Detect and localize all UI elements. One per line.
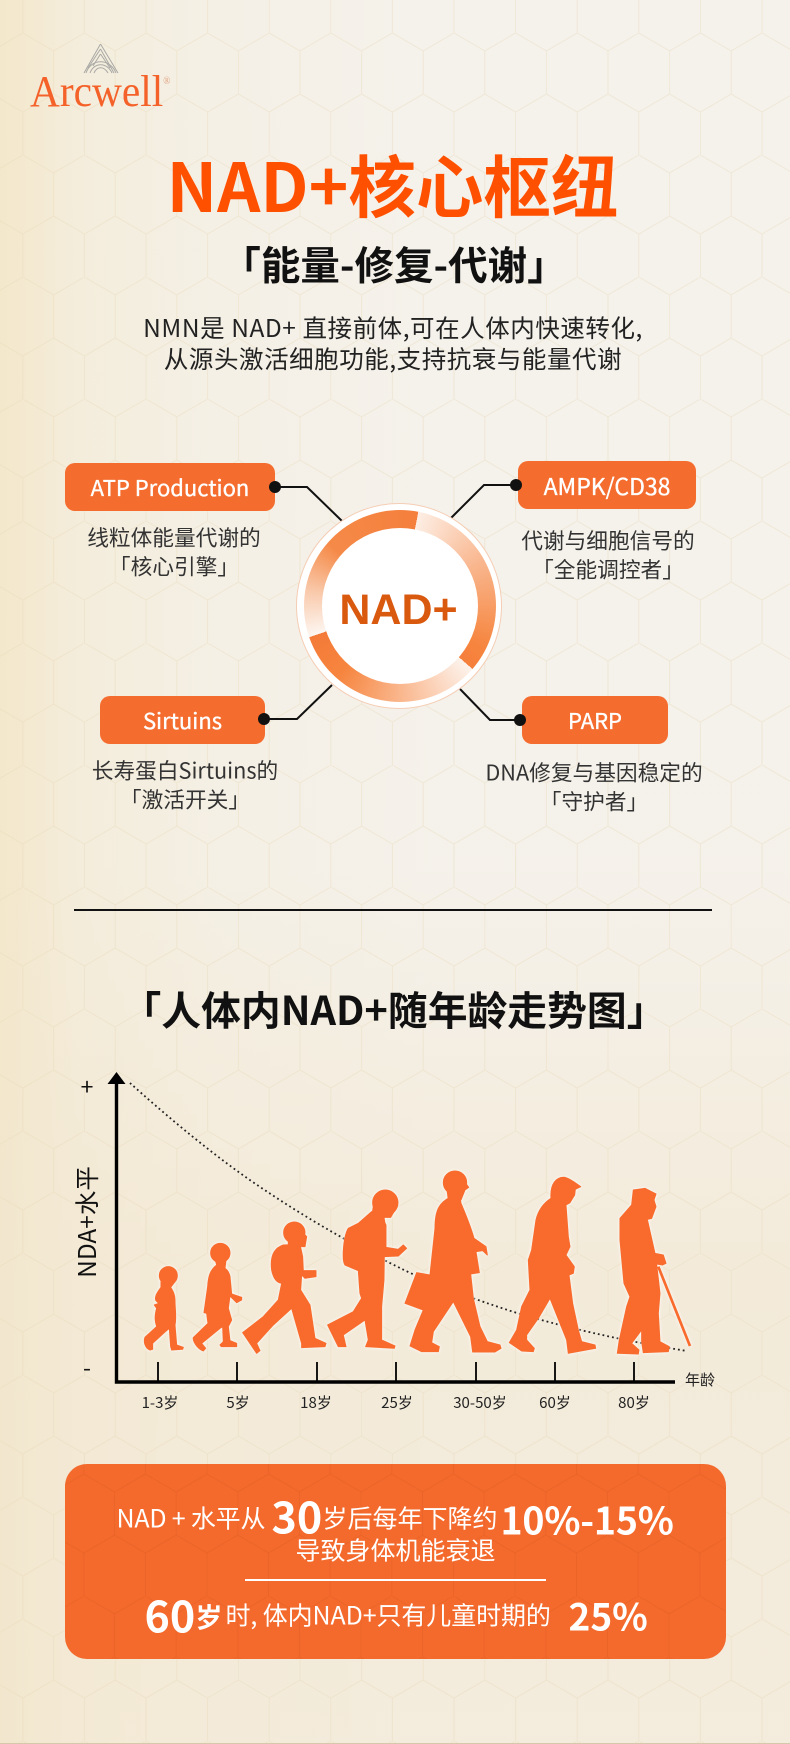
chart: NAD+ by age bbox=[69, 1068, 715, 1413]
text: PARP description: 「守护者」 bbox=[540, 785, 648, 816]
callout line 3: 60 bbox=[144, 1584, 195, 1646]
title: NAD+核心枢纽 bbox=[167, 135, 618, 232]
icon: logo triangle bbox=[84, 44, 118, 74]
person: elder with cane bbox=[617, 1188, 690, 1354]
pill: AMPK/CD38 bbox=[518, 461, 696, 509]
text: ATP description: 「核心引擎」 bbox=[109, 550, 239, 581]
pill: Sirtuins: Sirtuins bbox=[143, 704, 222, 736]
y axis scale marks: NDA+水平 bbox=[69, 1166, 104, 1278]
callout line 1: NAD + 水平从 bbox=[116, 1500, 265, 1536]
brand name: Arcwell® bbox=[30, 67, 170, 116]
person: adult with briefcase bbox=[405, 1171, 501, 1352]
axis labels: 25岁 bbox=[381, 1392, 413, 1413]
callout: decline statistics bbox=[64, 1464, 726, 1659]
silhouettes bbox=[144, 1171, 690, 1354]
intro text bbox=[143, 310, 643, 376]
hub label: NAD+ bbox=[339, 586, 458, 634]
person: child bbox=[193, 1243, 242, 1351]
axis labels: 80岁 bbox=[618, 1392, 650, 1413]
callout: decline statistics: 时, 体内NAD+只有儿童时期的 bbox=[226, 1596, 551, 1632]
text: AMPK description: 「全能调控者」 bbox=[532, 553, 684, 584]
y axis scale marks: - bbox=[83, 1349, 91, 1383]
callout: decline statistics: 岁后每年下降约 bbox=[322, 1500, 498, 1536]
text: Sirtuins description bbox=[92, 754, 278, 814]
axis labels: 1-3岁 bbox=[142, 1392, 178, 1413]
y axis scale marks bbox=[69, 1068, 104, 1383]
person: senior with cap bbox=[509, 1177, 596, 1353]
dotted trend curve bbox=[130, 1083, 687, 1351]
person: teen with backpack bbox=[243, 1222, 326, 1353]
intro text: 从源头激活细胞功能,支持抗衰与能量代谢 bbox=[164, 340, 622, 376]
person: toddler bbox=[144, 1267, 183, 1350]
connector lines bbox=[258, 479, 526, 726]
text: PARP description bbox=[485, 756, 703, 816]
callout texture bbox=[65, 1464, 726, 1659]
text: PARP description: DNA修复与基因稳定的 bbox=[485, 756, 703, 788]
callout: decline statistics: 10%-15% bbox=[500, 1490, 674, 1545]
ring centre bbox=[322, 528, 478, 684]
section heading: 「人体内NAD+随年龄走势图」 bbox=[122, 980, 666, 1037]
text: Sirtuins description: 「激活开关」 bbox=[120, 783, 250, 814]
pill: AMPK/CD38: AMPK/CD38 bbox=[544, 468, 670, 502]
axis labels: 18岁 bbox=[300, 1392, 332, 1413]
pill: Sirtuins bbox=[100, 696, 265, 744]
text: Sirtuins description: 长寿蛋白Sirtuins的 bbox=[92, 754, 278, 786]
axis labels bbox=[142, 1369, 715, 1413]
text: ATP description: 线粒体能量代谢的 bbox=[87, 522, 261, 552]
callout line 2: 导致身体机能衰退 bbox=[296, 1532, 496, 1568]
ring segments bbox=[304, 510, 496, 702]
callout: decline statistics: 岁 bbox=[196, 1596, 222, 1636]
pill: ATP Production: ATP Production bbox=[91, 471, 249, 503]
callout: decline statistics: 25% bbox=[568, 1588, 648, 1642]
axis labels: 年龄 bbox=[685, 1369, 715, 1390]
axis labels: 60岁 bbox=[539, 1392, 571, 1413]
pill: PARP: PARP bbox=[568, 704, 622, 736]
y axis scale marks: + bbox=[81, 1068, 93, 1102]
axis labels: 5岁 bbox=[226, 1392, 250, 1413]
text: AMPK description bbox=[521, 524, 695, 584]
pill: ATP Production bbox=[65, 463, 275, 511]
person: young adult with backpack bbox=[328, 1190, 407, 1348]
hub: NAD+ ring bbox=[296, 504, 500, 708]
text: AMPK description: 代谢与细胞信号的 bbox=[521, 524, 695, 556]
callout: decline statistics: 30 bbox=[272, 1484, 322, 1546]
intro text: NMN是 NAD+ 直接前体,可在人体内快速转化, bbox=[143, 310, 643, 344]
pill: PARP bbox=[522, 696, 668, 744]
axes bbox=[108, 1072, 675, 1382]
logo: Arcwell bbox=[30, 44, 170, 116]
text: ATP description bbox=[87, 522, 261, 581]
axis labels: 30-50岁 bbox=[453, 1392, 507, 1413]
subtitle: 「能量-修复-代谢」 bbox=[221, 235, 567, 292]
